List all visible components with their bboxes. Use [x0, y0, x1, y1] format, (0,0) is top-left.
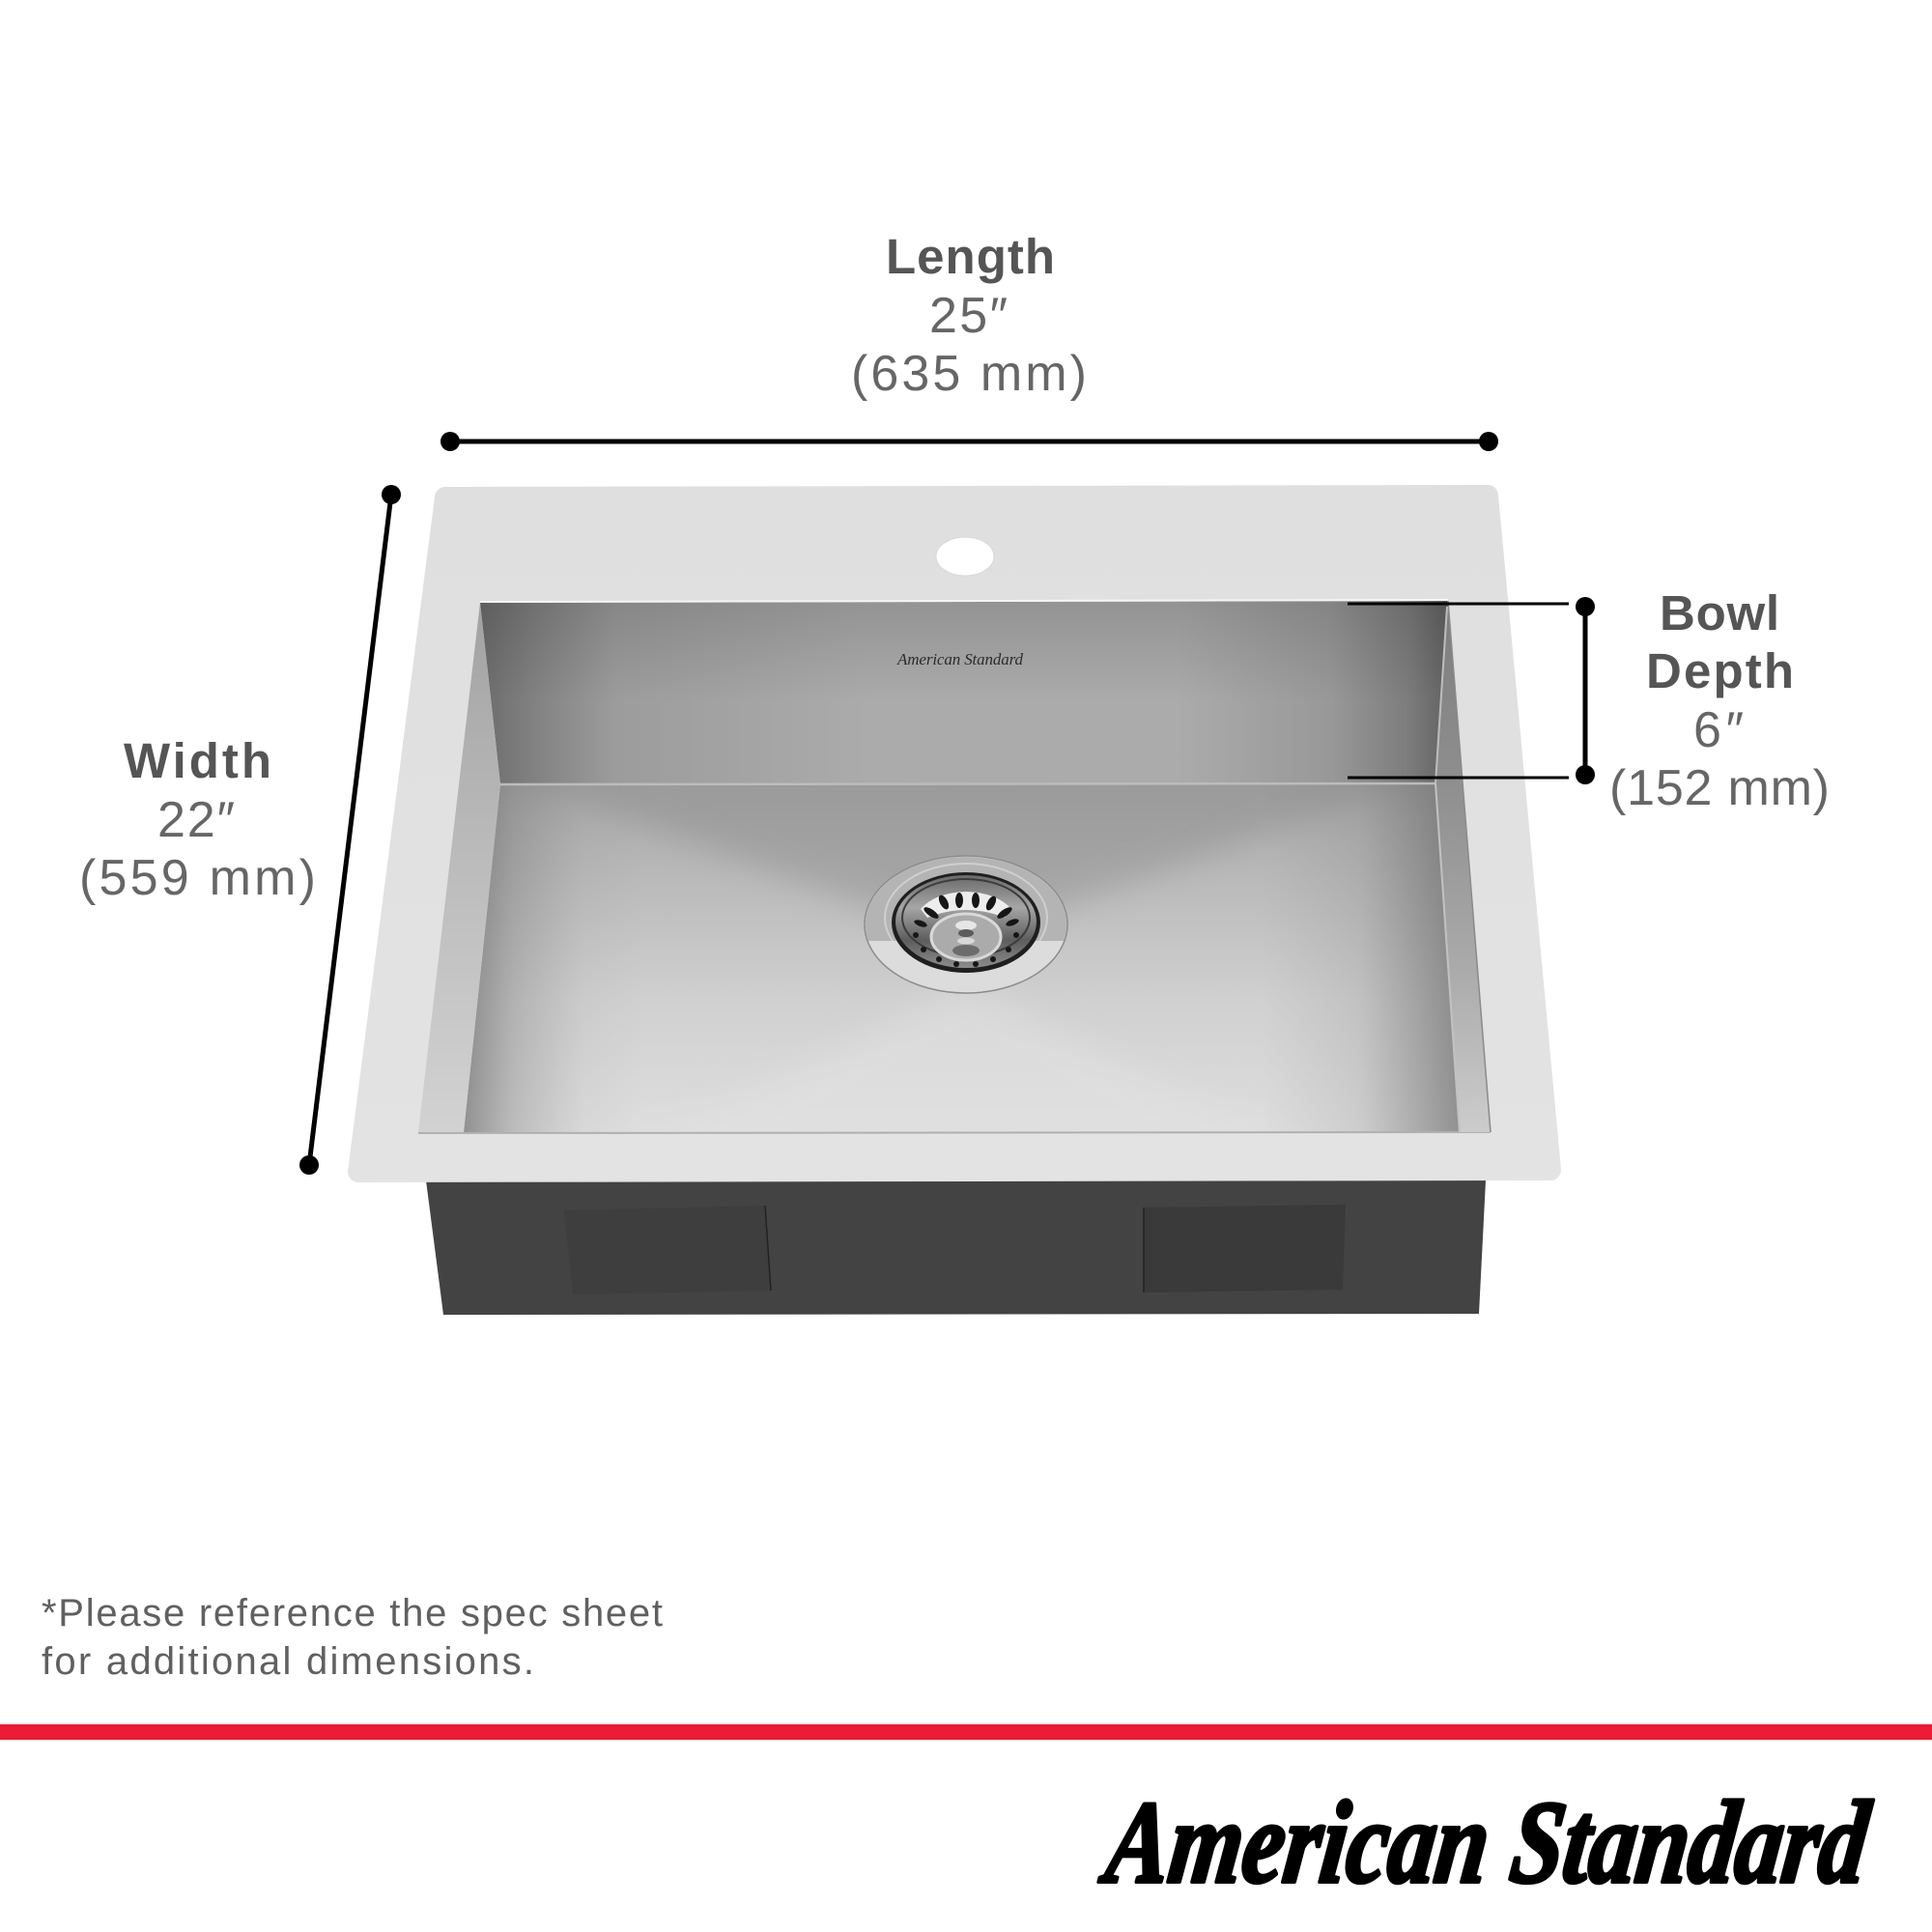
dimension: width line: [299, 485, 401, 1175]
label: bowl depth: (152 mm): [1609, 760, 1830, 816]
label: width: Width: [124, 733, 271, 788]
bowl back wall: [480, 600, 1448, 784]
label: bowl depth: [1609, 585, 1830, 816]
label: length: (635 mm): [851, 346, 1087, 402]
drain flange: [865, 856, 1067, 993]
bowl floor: [418, 763, 1491, 1150]
footnote: [42, 1592, 663, 1683]
bowl left wall: [418, 603, 500, 1132]
label: length: 25″: [929, 288, 1008, 344]
faucet hole: [936, 537, 994, 576]
bowl right wall: [1435, 601, 1491, 1132]
sink deck: [358, 496, 1550, 1172]
label: width: 22″: [157, 792, 235, 848]
label: bowl depth: 6″: [1693, 702, 1744, 758]
sink underbody: [426, 1180, 1486, 1315]
drain basket: [892, 872, 1040, 973]
drain: [865, 856, 1067, 993]
basket centre knob: [931, 914, 1001, 960]
small brand mark on back wall: American Standard: [896, 650, 1024, 668]
basket highlight crescent: [921, 892, 1011, 918]
label: length: Length: [886, 229, 1055, 284]
label: bowl depth: Bowl: [1660, 585, 1779, 640]
label: width: [79, 733, 316, 906]
sink illustration: [358, 496, 1550, 1315]
footnote: for additional dimensions.: [42, 1640, 534, 1683]
dimension: bowl depth bracket: [1348, 597, 1595, 784]
label: bowl depth: Depth: [1646, 643, 1794, 698]
footnote: *Please reference the spec sheet: [42, 1592, 663, 1634]
label: width: (559 mm): [79, 850, 316, 906]
red divider bar: [0, 1724, 1932, 1740]
dimension: length line: [440, 432, 1498, 451]
label: length: [851, 229, 1087, 402]
